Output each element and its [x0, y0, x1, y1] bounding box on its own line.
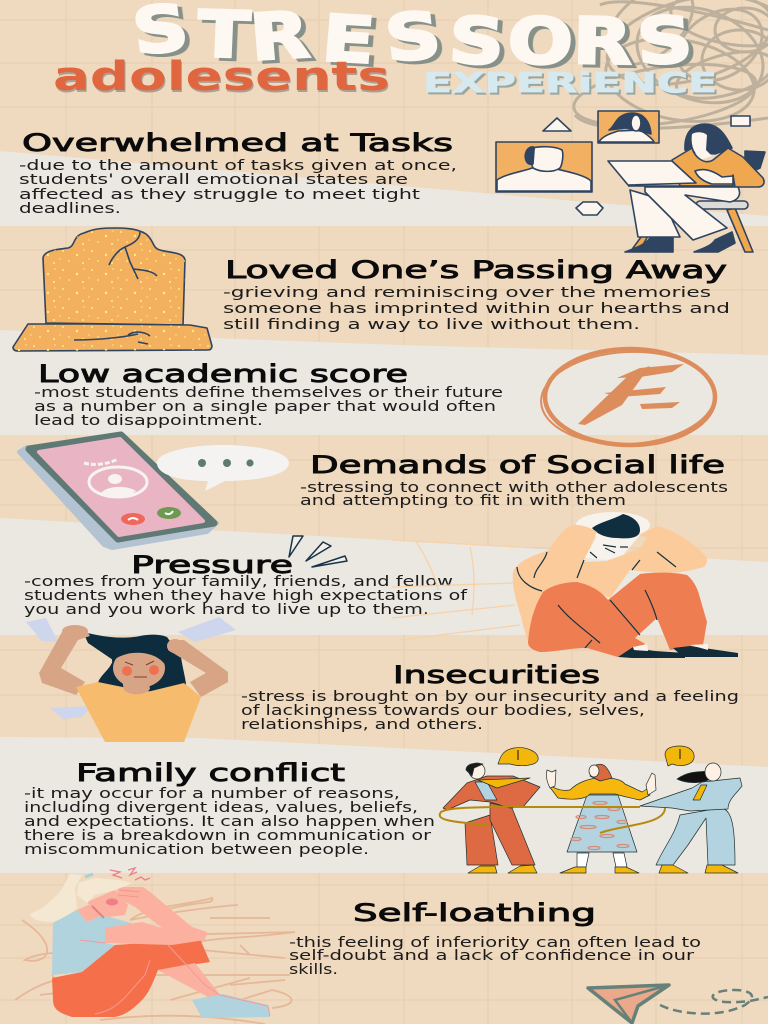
panel: low academic score: [34, 348, 717, 448]
body text: [289, 935, 701, 978]
body text: and expectations. It can also happen when: [24, 814, 435, 830]
body text: -due to the amount of tasks given at once,: [19, 158, 457, 174]
icon: video call illustration: [496, 111, 765, 252]
panel: insecurities: [26, 617, 739, 742]
F letter: [578, 364, 684, 425]
body text: you and you work hard to live up to them.: [24, 602, 429, 618]
icon: emphasis marks: [289, 536, 347, 567]
icon: speech bubble: [157, 445, 289, 491]
body text: [34, 385, 503, 429]
body text: self-doubt and a lack of confidence in our: [289, 948, 694, 964]
body text: students' overall emotional states are: [19, 172, 408, 188]
icon: distressed girl sitting: [15, 868, 295, 1024]
body text: miscommunication between people.: [24, 842, 369, 858]
body text: including divergent ideas, values, beliefs,: [24, 800, 418, 816]
icon: three people pulling a rope: [440, 746, 742, 873]
body text: -this feeling of inferiority can often lead to: [289, 935, 701, 951]
body text: [19, 158, 457, 217]
body text: affected as they struggle to meet tight: [19, 187, 421, 203]
body text: [300, 480, 728, 509]
heading: Family conflict: [76, 759, 345, 787]
icon: phone call: [19, 435, 289, 548]
body text: there is a breakdown in communication or: [24, 828, 431, 844]
body text: [24, 786, 435, 858]
background bands: [0, 151, 768, 873]
body text: -comes from your family, friends, and fellow: [24, 574, 453, 590]
title: [53, 0, 717, 100]
body text: and attempting to fit in with them: [300, 493, 626, 509]
heading: Insecurities: [393, 661, 600, 689]
icon: stressed man sitting: [392, 512, 738, 658]
icon: paper airplane: [588, 985, 768, 1023]
body text: -grieving and reminiscing over the memories: [223, 285, 711, 301]
panel: demands of social life: [19, 435, 728, 548]
heading: Demands of Social life: [310, 451, 725, 479]
body text: deadlines.: [19, 201, 121, 217]
title word: experience: EXPERiENCE: [423, 66, 717, 99]
heading: Overwhelmed at Tasks: [22, 129, 453, 157]
heading: Pressure: [131, 551, 293, 579]
heading: Self-loathing: [353, 899, 596, 927]
body text: -stressing to connect with other adolescents: [300, 480, 728, 496]
body text: relationships, and others.: [241, 717, 483, 733]
heading: Low academic score: [38, 360, 408, 388]
icon: warning bubbles: [498, 746, 694, 766]
body text: [241, 689, 739, 733]
body text: -stress is brought on by our insecurity and a feeling: [241, 689, 739, 705]
scribble decoration: [570, 0, 768, 136]
icon: circled F grade: [539, 348, 717, 448]
body text: [24, 574, 468, 618]
panel: family conflict: [24, 746, 742, 873]
body text: skills.: [289, 962, 338, 978]
panel: loved one's passing away: [13, 228, 730, 351]
panel: overwhelmed at tasks: [19, 111, 765, 252]
body text: lead to disappointment.: [34, 413, 263, 429]
icon: stressed woman: [26, 617, 236, 742]
heading: Loved One’s Passing Away: [225, 256, 727, 284]
title word: adolesents: adolesents: [53, 54, 390, 100]
body text: students when they have high expectations of: [24, 588, 468, 604]
body text: someone has imprinted within our hearths and: [223, 301, 730, 317]
panel: pressure: [24, 512, 738, 658]
body text: -it may occur for a number of reasons,: [24, 786, 400, 802]
panel: self-loathing: [15, 868, 768, 1024]
body text: -most students define themselves or their future: [34, 385, 503, 401]
body text: [223, 285, 730, 333]
body text: as a number on a single paper that would often: [34, 399, 496, 415]
icon: cracked tombstone: [13, 228, 212, 351]
body text: of lackingness towards our bodies, selves,: [241, 703, 645, 719]
body text: still finding a way to live without them.: [223, 317, 640, 333]
